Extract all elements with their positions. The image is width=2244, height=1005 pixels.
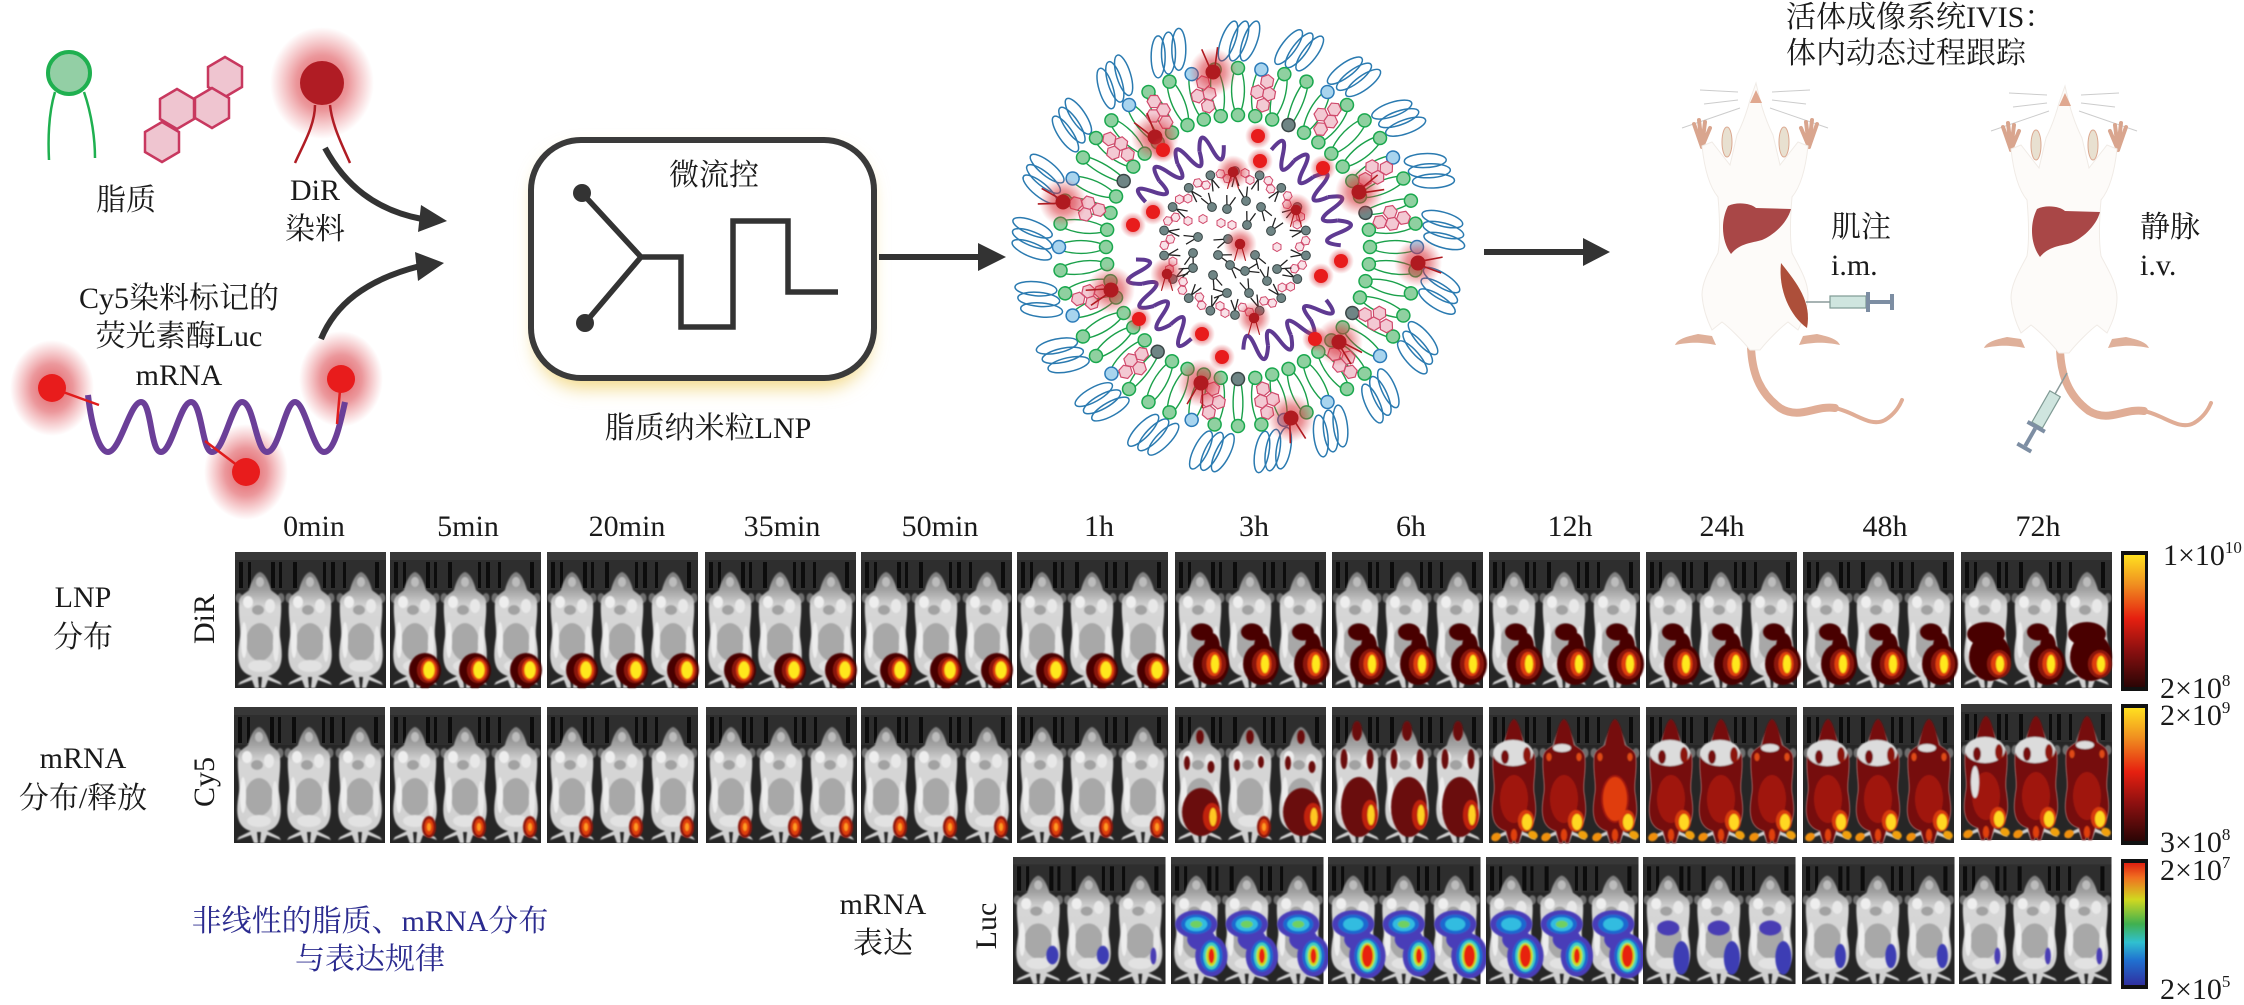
time axis labels: 48h: [1862, 510, 1908, 543]
panel: Luc 72h: [1959, 857, 2112, 984]
time axis labels: 0min: [283, 510, 345, 543]
diagram: lipid nanoparticle: [1009, 19, 1468, 476]
label: Cy5 mRNA: mRNA: [136, 359, 223, 392]
muscle: [1781, 263, 1808, 328]
icon: microfluidic channel: [573, 184, 838, 332]
label: DiR dye: DiR: [290, 174, 340, 207]
label: mRNA expression: 表达: [853, 927, 913, 960]
arrow: LNP to mice: [1484, 238, 1610, 266]
icon: cholesterol hexagons: [145, 57, 242, 162]
color bar: Luc: [2121, 859, 2148, 989]
icon: mRNA with Cy5 dots: [10, 331, 383, 520]
callout: nonlinear pattern: 与表达规律: [295, 943, 445, 976]
time axis labels: [283, 510, 2060, 543]
time axis labels: 20min: [589, 510, 665, 543]
panel: Cy5 12h: [1489, 707, 1640, 843]
panel: DiR 6h: [1332, 552, 1487, 688]
time axis labels: 6h: [1396, 510, 1426, 543]
illustration: mouse i.m.: [1675, 83, 1902, 422]
panel: DiR 72h: [1961, 552, 2112, 688]
time axis labels: 1h: [1084, 510, 1114, 543]
syringe i.v.: [2015, 368, 2076, 454]
panel: DiR 5min: [390, 552, 542, 688]
time axis labels: 35min: [744, 510, 820, 543]
color bar labels: Luc: [2160, 853, 2231, 1005]
label: i.m.: 肌注: [1831, 211, 1891, 244]
icon: DiR dye: [270, 27, 374, 163]
heading: IVIS: 活体成像系统IVIS：: [1786, 1, 2054, 34]
time axis labels: 24h: [1700, 510, 1744, 543]
label: LNP distribution: 分布: [53, 621, 113, 654]
panel: Luc 12h: [1486, 857, 1646, 984]
label: i.m.: i.m.: [1831, 249, 1878, 282]
lipid bilayer: [1052, 62, 1424, 432]
panel: Luc 1h: [1013, 857, 1166, 984]
box: [531, 140, 874, 378]
Cy5 dots on mRNA: [1120, 123, 1354, 370]
panel: microfluidics: [531, 140, 1006, 445]
panel: Cy5 3h: [1175, 707, 1326, 843]
panel: Luc 3h: [1171, 857, 1330, 984]
DiR dots in membrane: [1034, 45, 1444, 448]
color bar labels: DiR: [2160, 538, 2242, 705]
label: i.v.: i.v.: [2140, 249, 2176, 282]
color bar labels: Cy5: 8: [2222, 825, 2230, 844]
panel: Cy5 50min: [861, 707, 1012, 843]
color bar labels: Luc: 7: [2222, 853, 2231, 872]
callout: nonlinear pattern: 非线性的脂质、mRNA分布: [192, 905, 548, 938]
panel: Cy5 72h: [1961, 704, 2112, 840]
mRNA strands: [1123, 133, 1354, 362]
panel: DiR 20min: [547, 552, 699, 688]
panel: Luc 6h: [1328, 857, 1488, 984]
panel: Cy5 48h: [1803, 707, 1954, 843]
outer PEG coils: [1009, 19, 1468, 476]
panel: Cy5 24h: [1646, 707, 1797, 843]
color bar labels: Cy5: 2×10: [2160, 699, 2222, 732]
panel: DiR 24h: [1646, 552, 1801, 688]
color bar labels: Luc: 5: [2222, 972, 2230, 991]
label: i.v.: 静脉: [2140, 211, 2200, 244]
box glow: [535, 150, 870, 388]
row: DiR images: [235, 552, 2112, 688]
panel: Cy5 1h: [1017, 707, 1168, 843]
color bar: Cy5: [2121, 704, 2148, 845]
panel: DiR 50min: [861, 552, 1013, 688]
arrow: to LNP: [879, 243, 1006, 271]
label: Cy5: Cy5: [188, 757, 221, 807]
time axis labels: 5min: [437, 510, 499, 543]
label: lipid: 脂质: [96, 184, 156, 217]
row: Luc images: [1013, 857, 2112, 984]
panel: DiR 0min: [235, 552, 386, 688]
label: LNP distribution: LNP: [55, 581, 111, 614]
panel: Cy5 20min: [547, 707, 698, 843]
label: LNP: 脂质纳米粒LNP: [605, 412, 811, 445]
label: DiR: DiR: [188, 594, 221, 644]
color bar labels: Luc: 2×10: [2160, 854, 2222, 887]
time axis labels: 12h: [1548, 510, 1592, 543]
panel: DiR 3h: [1175, 552, 1330, 688]
panel: DiR 1h: [1017, 552, 1169, 688]
color bar labels: DiR: 2×10: [2160, 672, 2222, 705]
inner core: [1156, 165, 1314, 321]
panel: in vivo imaging: [1675, 1, 2211, 454]
label: DiR dye: 染料: [285, 213, 345, 246]
panel: DiR 48h: [1803, 552, 1958, 688]
label: mRNA distribution: mRNA: [40, 742, 126, 775]
color bar labels: Cy5: [2160, 698, 2230, 859]
color bar labels: DiR: 10: [2225, 538, 2242, 557]
panel: Cy5 0min: [234, 707, 385, 843]
arrow: DiR to microfluidics: [325, 148, 447, 232]
panel: Cy5 35min: [706, 707, 857, 843]
color bar labels: Cy5: 3×10: [2160, 826, 2222, 859]
row: Cy5 images: [234, 704, 2112, 843]
color bar labels: Cy5: 9: [2222, 698, 2230, 717]
time axis labels: 72h: [2016, 510, 2060, 543]
color bar: DiR: [2121, 551, 2148, 691]
color bar labels: DiR: 1×10: [2163, 539, 2225, 572]
panel: Luc 24h: [1643, 857, 1796, 984]
color bar labels: DiR: 8: [2222, 671, 2230, 690]
panel: Luc 48h: [1802, 857, 1955, 984]
heading: IVIS: 体内动态过程跟踪: [1786, 37, 2027, 70]
syringe i.m.: [1806, 292, 1894, 312]
label: mRNA expression: mRNA: [840, 888, 926, 921]
panel: DiR 35min: [705, 552, 857, 688]
label: Cy5 mRNA: Cy5染料标记的: [79, 282, 279, 315]
heading: microfluidics: 微流控: [669, 159, 759, 192]
panel: DiR 12h: [1489, 552, 1644, 688]
time axis labels: 50min: [902, 510, 978, 543]
label: Luc: Luc: [970, 903, 1003, 949]
illustration: mouse i.v.: [1984, 86, 2211, 454]
panel: components: [10, 27, 447, 520]
time axis labels: 3h: [1239, 510, 1269, 543]
panel: Cy5 5min: [390, 707, 541, 843]
arrow: mRNA to microfluidics: [321, 252, 444, 339]
label: Cy5 mRNA: 荧光素酶Luc: [96, 320, 262, 353]
cholesterol in bilayer: [1065, 72, 1412, 422]
panel: Cy5 6h: [1332, 707, 1483, 843]
label: mRNA distribution: 分布/释放: [19, 782, 147, 815]
icon: lipid: [48, 52, 95, 160]
